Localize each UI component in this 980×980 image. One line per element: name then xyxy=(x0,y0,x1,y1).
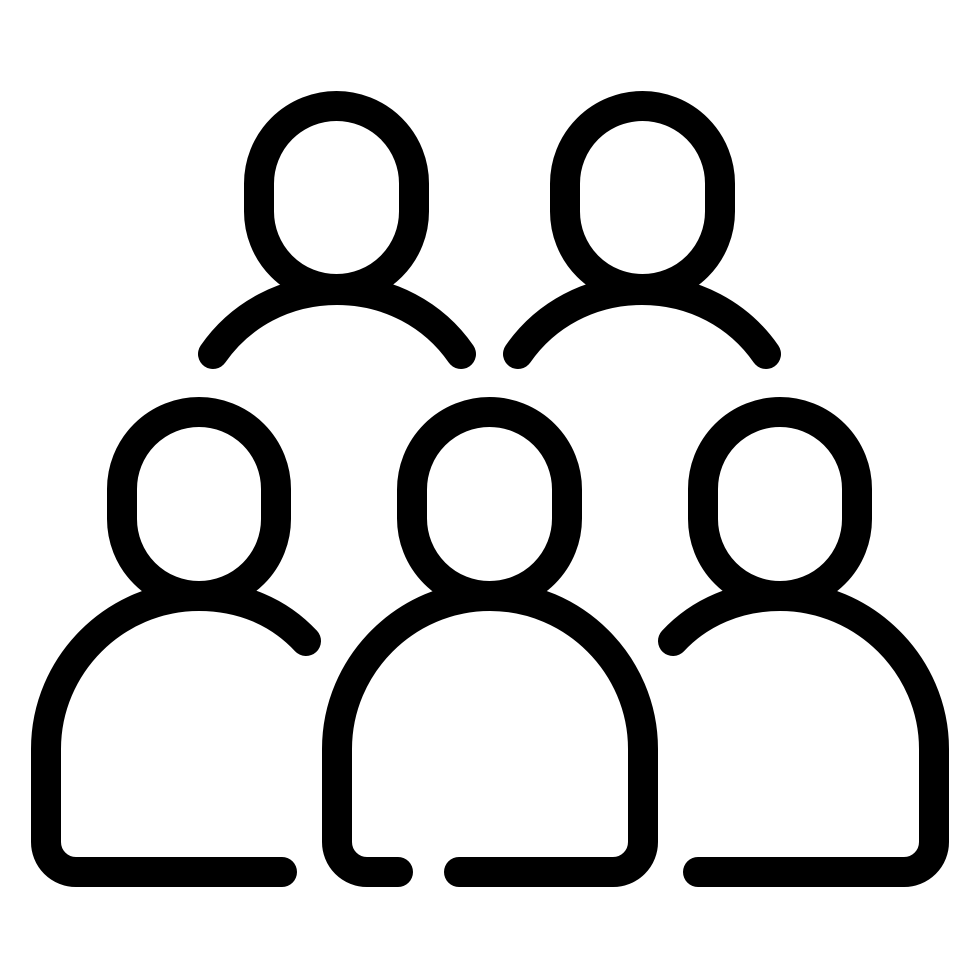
icon: front row person right xyxy=(673,412,934,872)
icon: front row person centre xyxy=(337,412,643,872)
icon: back row person right xyxy=(518,106,766,354)
icon: front row person left xyxy=(46,412,306,872)
icon: back row person left xyxy=(213,106,461,354)
